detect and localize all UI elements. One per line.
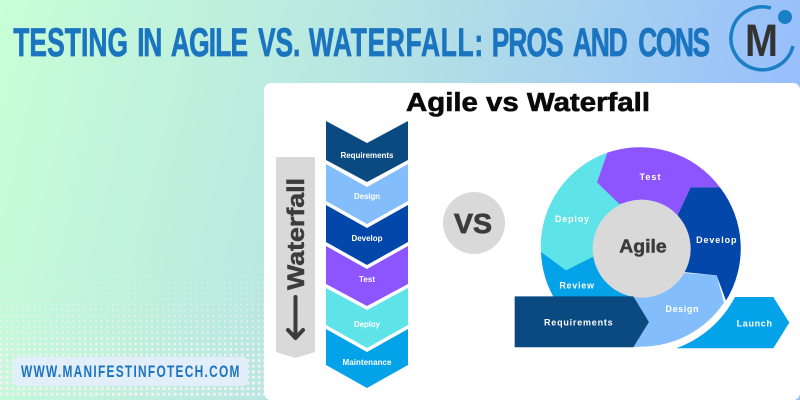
step: maintenance: Maintenance [342, 358, 392, 367]
icon: down arrow [288, 297, 303, 338]
title: AND [573, 21, 628, 65]
arrow: requirements [515, 296, 649, 347]
waterfall direction bar: Waterfall [283, 178, 310, 290]
segment: develop [678, 187, 741, 301]
waterfall direction bar [276, 157, 315, 358]
step: design: Design [354, 192, 380, 201]
heading: Agile vs Waterfall [406, 89, 650, 117]
segment: develop: Develop [696, 235, 737, 245]
center: agile [593, 200, 691, 298]
segment: deploy: Deploy [555, 214, 589, 224]
title: CONS [638, 21, 710, 65]
arrow: launch: Launch [737, 319, 772, 329]
step: requirements: Requirements [340, 151, 394, 160]
arrow: requirements: Requirements [544, 317, 613, 327]
title: IN [137, 21, 162, 65]
title: TESTING [13, 21, 128, 65]
website url [13, 357, 248, 386]
title: PROS [492, 21, 564, 65]
segment: test: Test [639, 172, 660, 182]
agile cycle [515, 147, 789, 348]
segment: design: Design [665, 304, 698, 314]
title: WATERFALL: [309, 21, 483, 65]
step: design [326, 164, 408, 224]
step: test: Test [359, 275, 375, 284]
center: agile: Agile [619, 236, 667, 257]
segment: deploy [541, 153, 623, 270]
vs badge [443, 192, 505, 254]
step: deploy: Deploy [354, 320, 381, 329]
title: VS. [258, 21, 300, 65]
vs badge: VS [454, 208, 492, 239]
segment: review: Review [559, 281, 594, 291]
website url: WWW.MANIFESTINFOTECH.COM [21, 363, 239, 382]
arrow: launch [676, 297, 789, 348]
step: requirements [326, 121, 408, 182]
title: AGILE [171, 21, 248, 65]
logo: M [745, 15, 778, 66]
segment: design [633, 272, 724, 347]
step: develop: Develop [352, 234, 383, 243]
step: develop [326, 205, 408, 265]
segment: test [597, 147, 720, 215]
step: deploy [326, 288, 408, 348]
step: test [326, 246, 408, 306]
step: maintenance [326, 329, 408, 388]
waterfall chevrons [326, 121, 408, 388]
logo [731, 7, 793, 70]
panel: agile vs waterfall [264, 83, 800, 400]
title [13, 21, 710, 65]
segment: review [541, 252, 640, 297]
